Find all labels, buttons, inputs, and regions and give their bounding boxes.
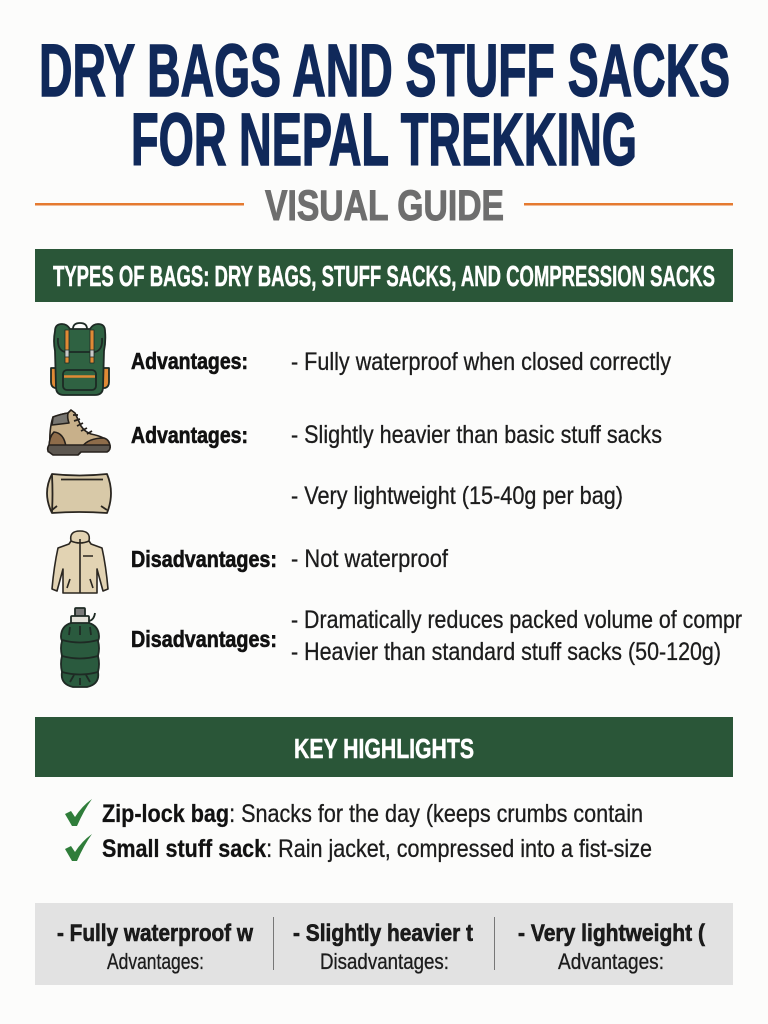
title [39, 29, 730, 181]
label: disadvantages 2: Disadvantages: [131, 626, 277, 652]
icon: hiking boot [48, 410, 110, 455]
summary column 3 [518, 920, 705, 974]
summary column 2: Disadvantages: [320, 949, 449, 974]
icon: check mark 2 [65, 834, 92, 861]
summary column 2 [293, 920, 473, 974]
icon: check mark 1 [65, 799, 92, 826]
text: stuff sack lightweight: - Very lightweight (15-40g per bag) [291, 482, 623, 510]
icon: stuff sack [47, 474, 111, 513]
highlight: zip-lock bag: Zip-lock bag: Snacks for the day (keeps crumbs contain [102, 800, 643, 828]
text: advantage 1: - Fully waterproof when closed correctly [291, 348, 671, 376]
text: disadvantage 1: - Not waterproof [291, 545, 448, 573]
label: advantages 2: Advantages: [131, 422, 248, 448]
icon: jacket [52, 531, 108, 593]
summary column 1 [57, 920, 253, 974]
section header: key highlights [35, 717, 733, 777]
summary column 1: Advantages: [107, 949, 204, 974]
label: advantages 1: Advantages: [131, 348, 248, 374]
label: disadvantages 1: Disadvantages: [131, 546, 277, 572]
section header: key highlights: KEY HIGHLIGHTS [294, 733, 474, 764]
subtitle: visual guide: VISUAL GUIDE [265, 182, 504, 230]
icon: backpack [51, 323, 109, 395]
summary column 1: - Fully waterproof w [57, 920, 253, 947]
highlight: small stuff sack: Small stuff sack: Rain jacket, compressed into a fist-size [102, 835, 652, 863]
icon: compression sack [61, 608, 99, 687]
text: advantage 2: - Slightly heavier than basic stuff sacks [291, 421, 662, 449]
section header: types of bags [35, 249, 733, 302]
summary column 3: Advantages: [558, 949, 664, 974]
panel: summary strip [35, 903, 733, 985]
summary column 2: - Slightly heavier t [293, 920, 473, 947]
summary column 3: - Very lightweight ( [518, 920, 705, 947]
text: disadvantage 2 [291, 606, 742, 666]
